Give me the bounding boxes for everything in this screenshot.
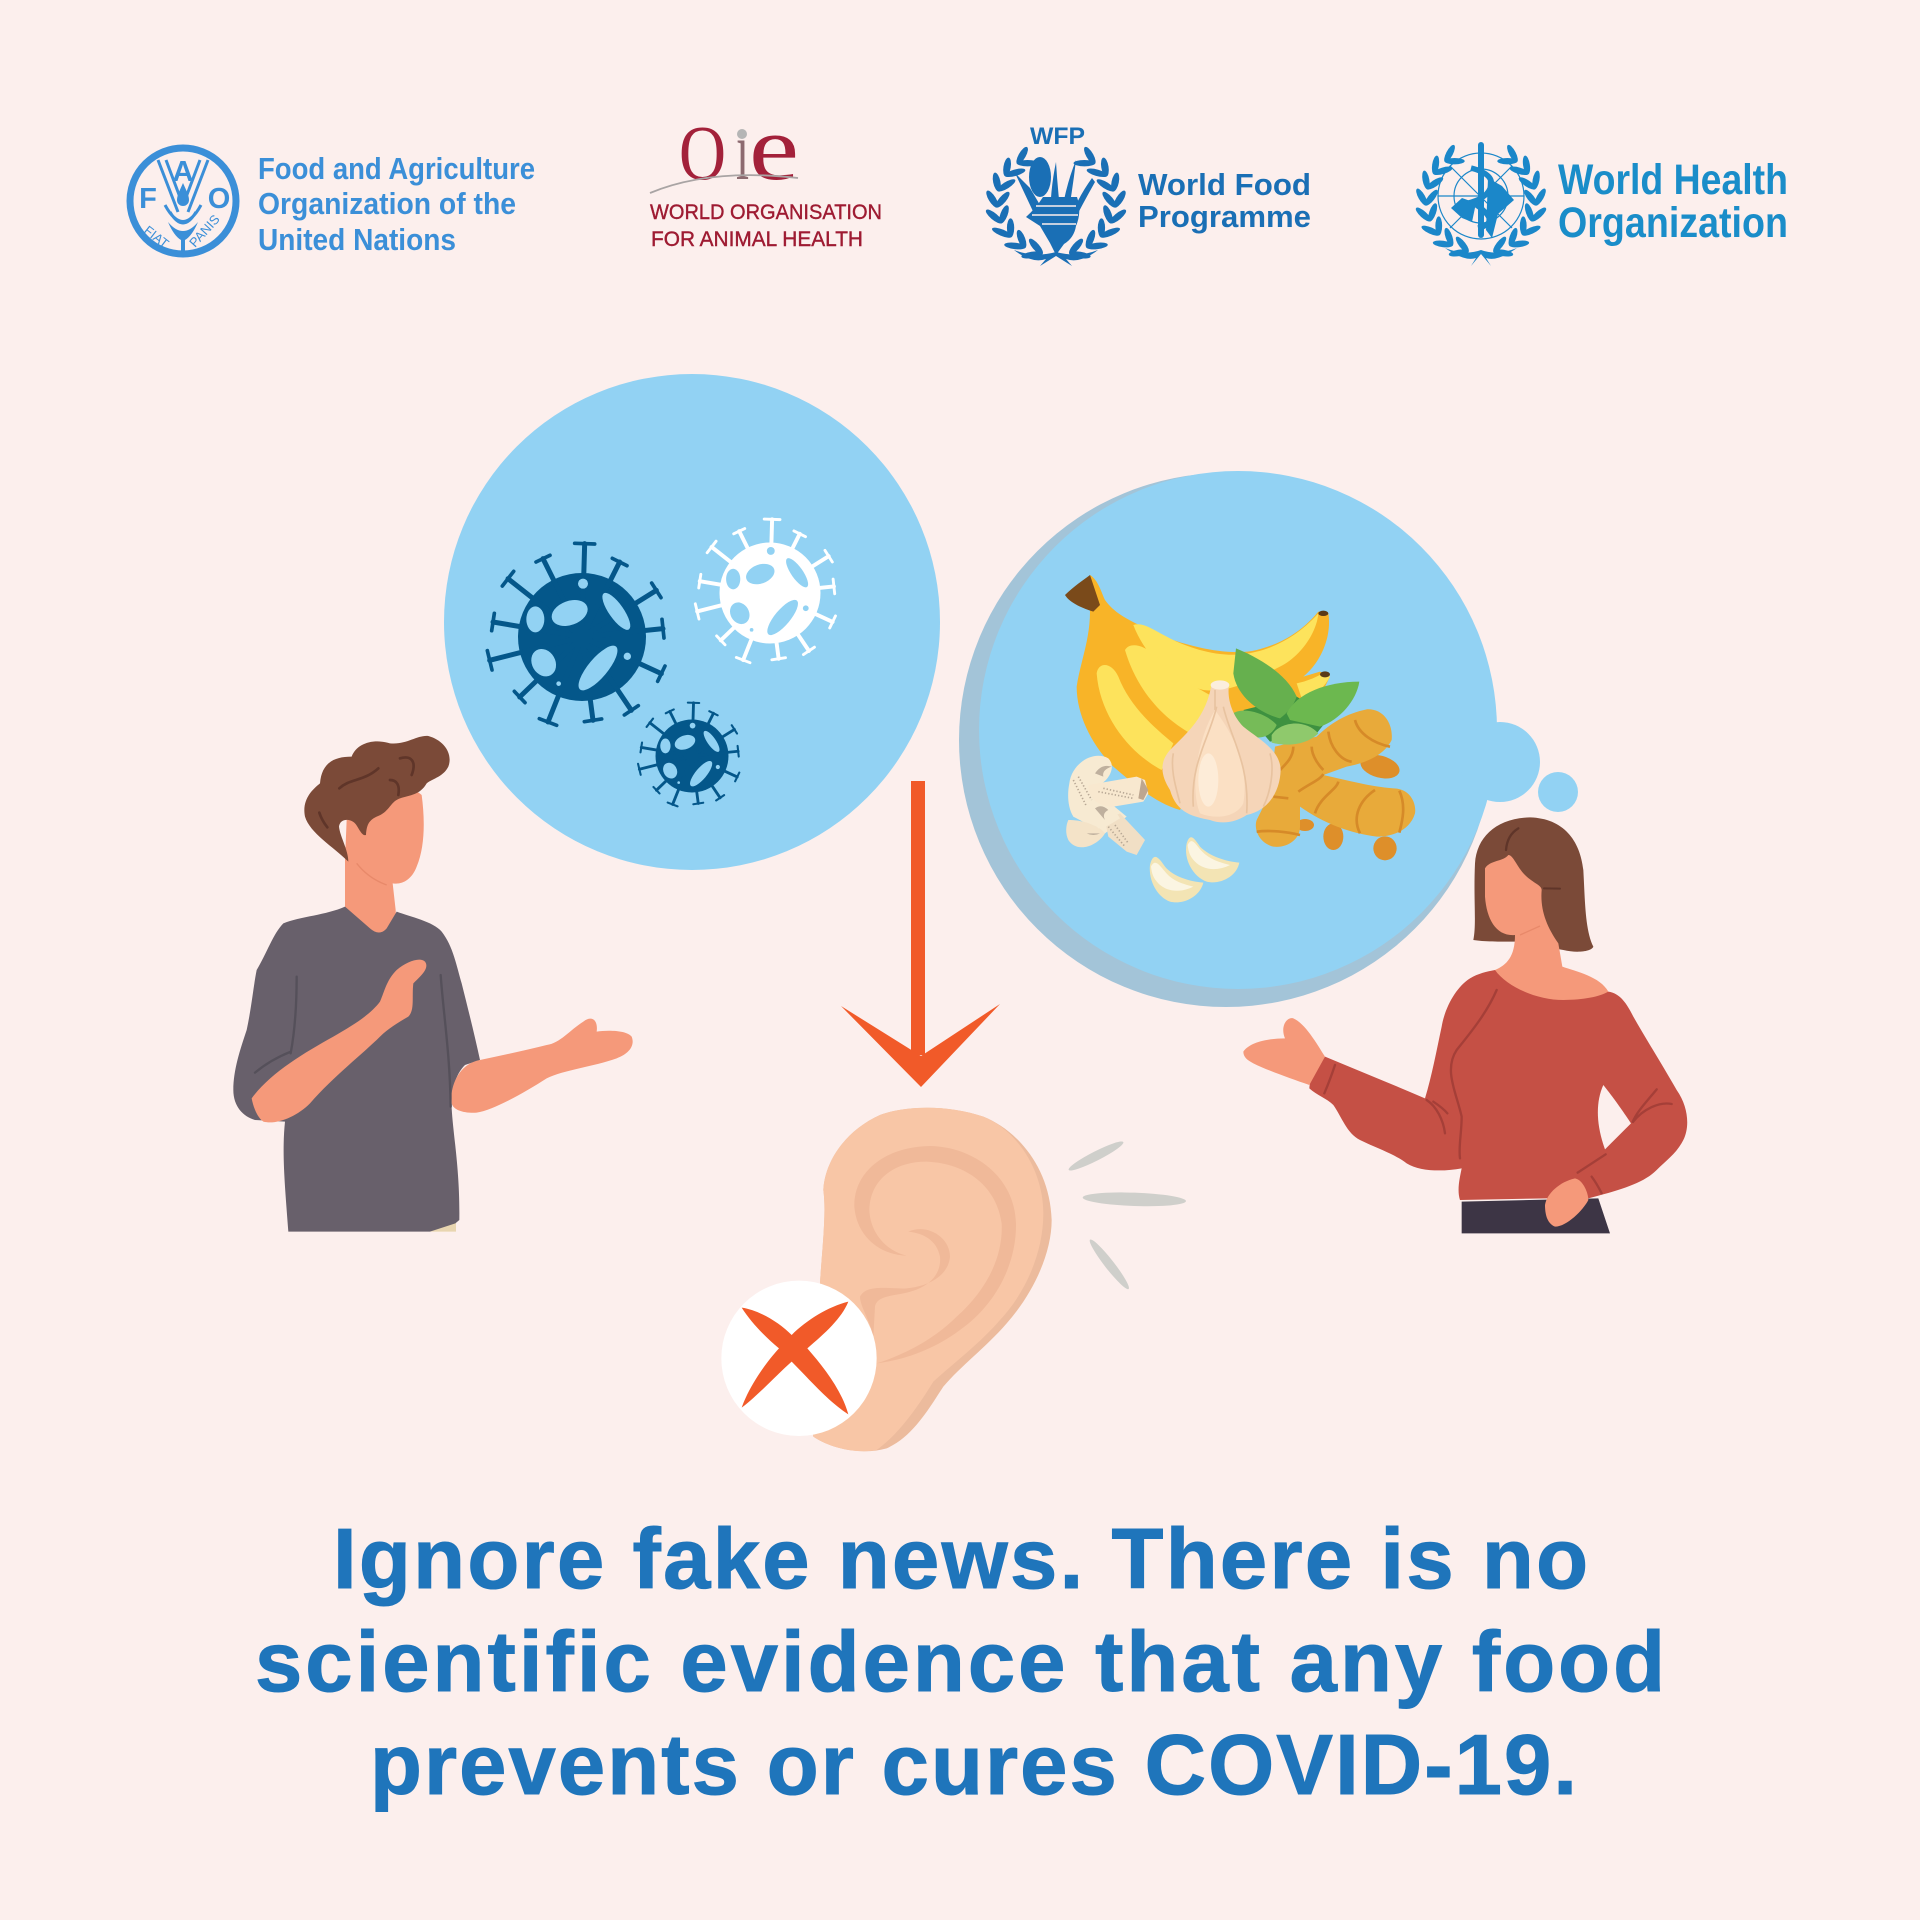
logo: WFP: WFP [1030, 123, 1085, 150]
ear [800, 1108, 1052, 1451]
headline [255, 1512, 1665, 1813]
logo text: FAO: United Nations [258, 222, 456, 257]
logo text: WFP [1138, 167, 1311, 234]
logo: OIE: ı [736, 105, 749, 198]
logo: WHO [1413, 142, 1549, 266]
garlic bulb [1162, 680, 1281, 822]
woman hand on hip [1545, 1178, 1588, 1227]
woman [1243, 817, 1687, 1233]
man hair [304, 736, 450, 885]
cross badge [721, 1281, 877, 1436]
headline: scientific evidence that any food [255, 1615, 1665, 1710]
logo: FAO: A [173, 156, 194, 188]
bananas [1065, 575, 1330, 810]
logo: WFP [983, 123, 1129, 266]
headline: Ignore fake news. There is no [333, 1512, 1588, 1607]
logo: FAO: PANIS [186, 211, 223, 250]
man shirt [233, 907, 480, 1232]
man arm on chest [252, 960, 426, 1122]
arrow [841, 781, 1000, 1087]
logo text: FAO [258, 151, 535, 257]
ear illustration [721, 1108, 1186, 1451]
logo text: FAO: Food and Agriculture [258, 151, 535, 186]
headline: prevents or cures COVID-19. [370, 1718, 1577, 1813]
logo: FAO: FIAT [141, 223, 172, 251]
woman sweater [1309, 970, 1687, 1200]
logo: OIE: WORLD ORGANISATION [650, 201, 882, 224]
mushrooms [1066, 756, 1148, 855]
icon: small dark virus [638, 703, 739, 806]
logo: OIE: FOR ANIMAL HEALTH [651, 228, 863, 251]
icon: large dark virus [487, 543, 665, 725]
thought bubble [959, 471, 1578, 1007]
woman trousers [1462, 1198, 1610, 1233]
logo: FAO: O [208, 183, 230, 215]
woman face and neck [1485, 855, 1608, 1007]
man [233, 736, 633, 1232]
logo text: WHO: World Health [1558, 156, 1788, 204]
woman hair [1473, 817, 1593, 952]
turmeric root [1256, 688, 1415, 860]
logo text: WFP: Programme [1138, 199, 1311, 234]
garlic cloves [1150, 837, 1239, 902]
woman raised hand [1243, 1018, 1325, 1085]
logo: OIE [650, 97, 882, 251]
logo: FAO [130, 148, 236, 254]
logo: FAO: F [139, 183, 157, 215]
sound marks [1067, 1138, 1186, 1292]
left bubble [444, 374, 940, 870]
logo text: WHO [1558, 156, 1788, 247]
food group [1065, 575, 1415, 902]
logo text: WFP: World Food [1138, 167, 1311, 202]
logo text: WHO: Organization [1558, 199, 1788, 247]
logo: OIE: e [749, 97, 799, 199]
logo text: FAO: Organization of the [258, 186, 516, 221]
logo: OIE: O [679, 109, 726, 196]
basil leaves [1233, 648, 1359, 745]
man extended arm [452, 1019, 633, 1113]
icon: white virus [695, 519, 835, 663]
man head and neck [345, 790, 424, 933]
